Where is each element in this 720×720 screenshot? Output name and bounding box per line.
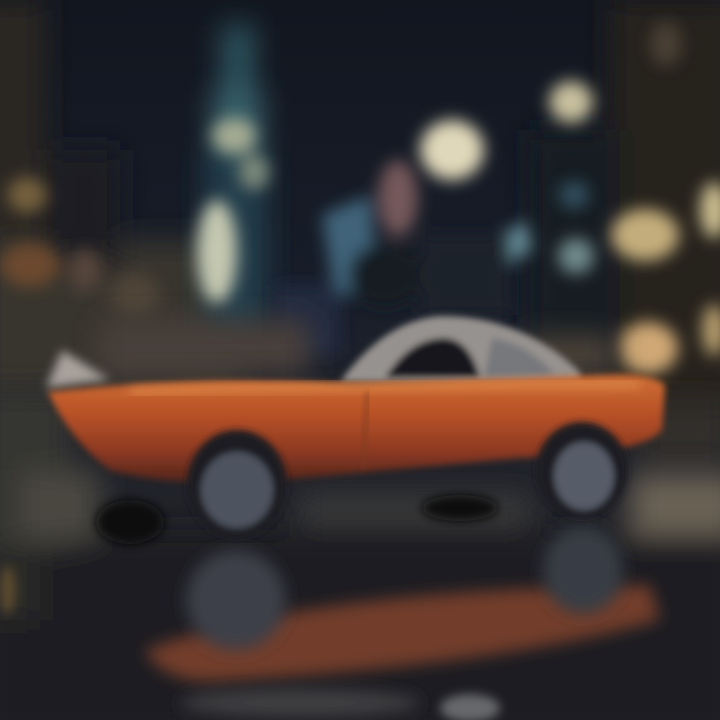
car (46, 316, 665, 544)
front wheel (187, 430, 287, 538)
car reflection on wet road (0, 526, 660, 720)
door seam (362, 392, 368, 470)
car body (48, 374, 665, 482)
under-car dark area (422, 495, 498, 521)
car shadow (96, 500, 164, 544)
buildings: right dark side (530, 0, 720, 420)
skyline tower (205, 25, 267, 340)
street haze behind car (100, 320, 615, 375)
central buildings (275, 160, 532, 355)
rear wheel (536, 422, 628, 518)
body highlight (130, 384, 640, 392)
car headlight trim (46, 350, 110, 388)
ground (0, 390, 720, 720)
buildings: left dark side (0, 0, 240, 400)
window lights (0, 22, 720, 374)
car roof and windows (340, 316, 580, 385)
